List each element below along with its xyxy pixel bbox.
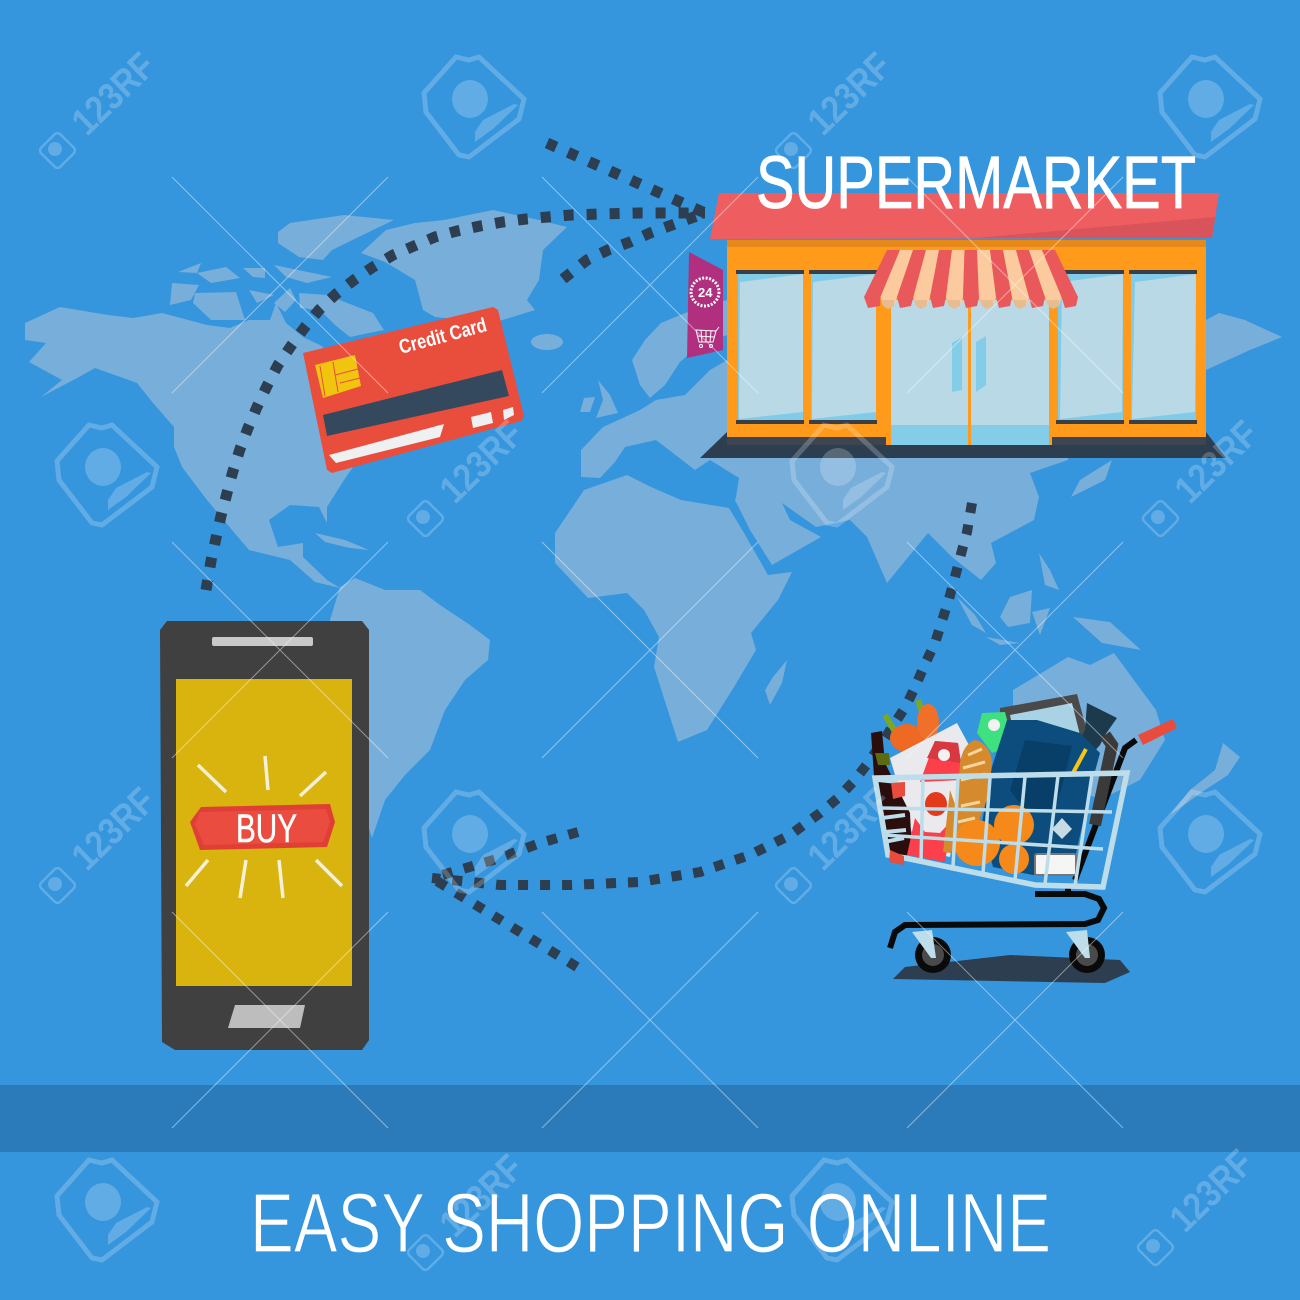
dotted arrow: phone to supermarket <box>206 143 705 590</box>
title: easy shopping online: EASY SHOPPING ONLINE <box>250 1176 1051 1270</box>
windows <box>738 274 1196 420</box>
speaker <box>212 637 313 646</box>
green carton <box>977 712 1009 753</box>
magnetic stripe <box>323 370 509 436</box>
flashlight and strap <box>1055 703 1117 825</box>
24 hours badge: 24 <box>698 285 713 300</box>
dotted arrow: cart to phone <box>432 503 972 967</box>
watermark: 123RF text: 123RF <box>1167 413 1267 511</box>
roof <box>710 193 1219 239</box>
cart shadow <box>893 955 1130 983</box>
carrots <box>885 700 939 752</box>
screen <box>176 679 352 986</box>
watermark: 123RF text: 123RF <box>800 45 900 143</box>
home button <box>228 1005 305 1028</box>
shopping cart <box>871 694 1177 983</box>
signature strip <box>329 424 444 463</box>
thin white cross lines <box>172 177 1123 1128</box>
tablet <box>1000 694 1088 740</box>
hanging sign <box>687 252 723 358</box>
door <box>891 300 1049 445</box>
striped awning <box>864 250 1078 309</box>
watermark: 123RF text: 123RF <box>1162 1142 1262 1240</box>
cart basket frame <box>875 773 1127 887</box>
supermarket building <box>687 193 1226 458</box>
shine rays <box>186 756 342 898</box>
watermark: camera marks <box>38 131 1180 1272</box>
wall <box>727 240 1206 445</box>
watermark: 123RF text: 123RF <box>800 780 900 878</box>
smartphone <box>160 621 369 1050</box>
baguette <box>943 740 992 853</box>
world map <box>25 210 1282 838</box>
card label: Credit Card <box>397 314 489 359</box>
backpack <box>982 720 1100 875</box>
qr label <box>1052 818 1072 839</box>
red carton <box>907 741 961 862</box>
credit card <box>303 307 524 473</box>
receipt box <box>1035 854 1076 875</box>
watermark: 123RF text: 123RF <box>64 780 164 878</box>
watermark: 123RF text: 123RF <box>432 1147 532 1245</box>
watermark: 123RF text: 123RF <box>64 45 164 143</box>
oranges <box>954 805 1034 874</box>
chip <box>315 355 361 398</box>
paper bag <box>890 723 970 857</box>
handle <box>1075 740 1136 880</box>
floor <box>700 432 1226 458</box>
watermark: 123RF text: 123RF <box>432 413 532 511</box>
buy button: BUY <box>236 807 297 851</box>
small cart icon <box>696 327 719 348</box>
pencil <box>1073 749 1086 773</box>
chassis <box>890 887 1104 948</box>
wheels <box>915 937 1105 973</box>
window bars <box>736 270 1197 424</box>
bottle <box>871 731 912 855</box>
red corner bumpers <box>889 782 905 865</box>
bottom band <box>0 1085 1300 1152</box>
buy button <box>190 804 335 851</box>
